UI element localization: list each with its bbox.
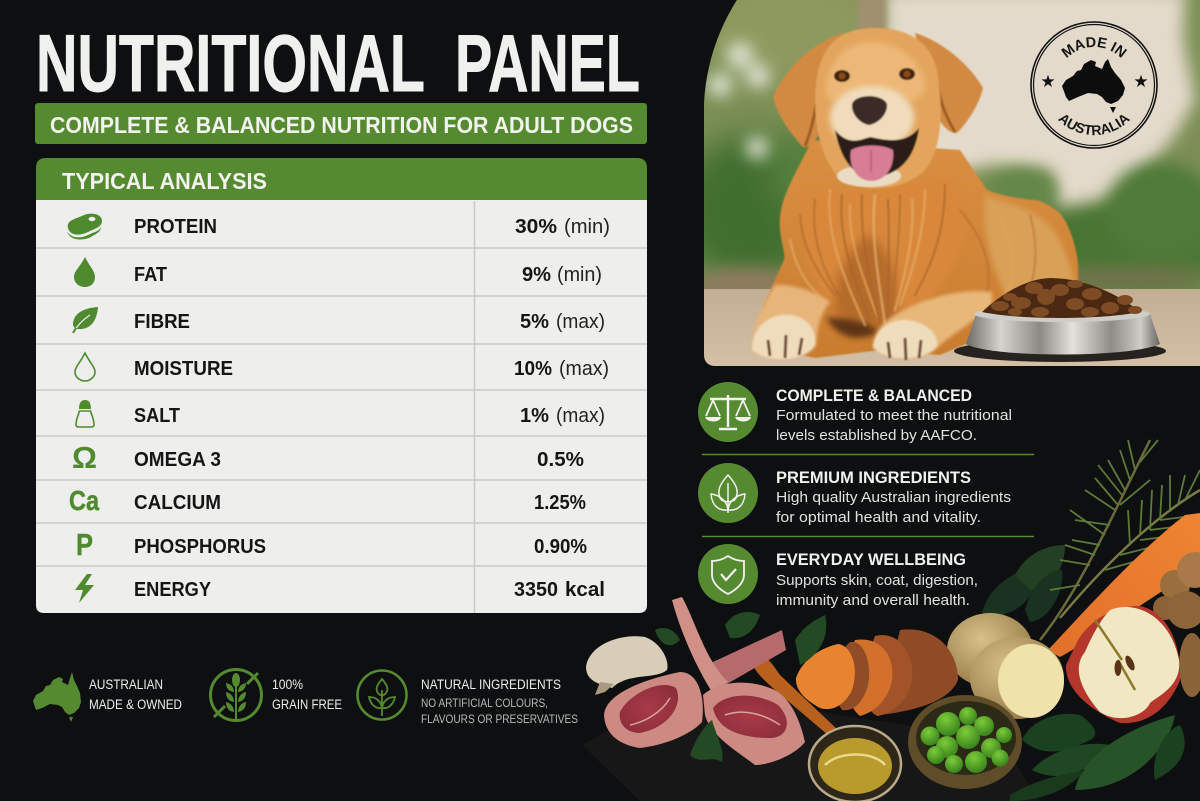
panel: benefit premium ingredients: for optimal health and vitality.	[776, 509, 981, 526]
row: moisture: 10%	[514, 358, 552, 380]
lamb chop right	[672, 597, 805, 765]
panel: benefit everyday wellbeing: immunity and overall health.	[776, 592, 970, 609]
icon: shield	[698, 544, 758, 604]
row: fat: (min)	[557, 264, 602, 286]
row: calcium: Ca	[69, 485, 99, 516]
row: fibre: 5%	[520, 311, 549, 333]
eyes	[834, 70, 850, 82]
panel: benefit complete and balanced: Formulated to meet the nutritional	[776, 407, 1012, 424]
badge: natural ingredients: NATURAL INGREDIENTS	[421, 677, 561, 692]
rosemary	[1040, 440, 1200, 640]
row: energy: 3350	[514, 579, 558, 601]
panel: benefit everyday wellbeing	[698, 544, 978, 609]
dog head	[773, 33, 845, 147]
small carrot	[753, 655, 838, 735]
title: NUTRITIONAL	[36, 19, 425, 109]
badge: natural ingredients: NO ARTIFICIAL COLOURS,	[421, 696, 548, 710]
herbs	[655, 612, 826, 762]
row: calcium: CALCIUM	[134, 492, 221, 514]
food still life	[582, 440, 1200, 801]
mouth	[835, 128, 919, 178]
row: omega 3: 0.5%	[537, 449, 584, 471]
potatoes	[947, 613, 1033, 687]
row: calcium	[69, 485, 586, 516]
stamp: made in australia: ★	[1040, 72, 1056, 91]
left foreleg and paw	[753, 285, 830, 359]
wall	[885, 0, 1195, 207]
row: omega 3: OMEGA 3	[134, 449, 221, 471]
badge: australian made and owned: AUSTRALIAN	[89, 677, 163, 692]
row: salt: (max)	[556, 405, 605, 427]
row: fibre: FIBRE	[134, 311, 190, 333]
dog	[752, 28, 1078, 360]
panel: benefit premium ingredients: PREMIUM INGREDIENTS	[776, 468, 971, 487]
panel: benefit complete and balanced	[698, 382, 1012, 444]
row: moisture: (max)	[559, 358, 609, 380]
icon: sprout	[358, 670, 406, 720]
mushrooms right	[1153, 552, 1200, 697]
icon: scales	[698, 382, 758, 442]
panel: benefit complete and balanced: COMPLETE & BALANCED	[776, 386, 972, 405]
row: energy: kcal	[565, 579, 605, 601]
title: PANEL	[455, 19, 640, 109]
photo: golden retriever with kibble bowl	[704, 0, 1200, 366]
badge: australian made and owned	[33, 672, 182, 722]
row: phosphorus: P	[76, 527, 93, 562]
row: energy	[75, 574, 605, 603]
pea bowl	[908, 695, 1022, 789]
panel: benefit everyday wellbeing: EVERYDAY WELLBEING	[776, 550, 966, 569]
icon: leaves	[698, 463, 758, 523]
badge: grain free: 100%	[272, 677, 303, 692]
row: fibre: (max)	[556, 311, 605, 333]
apple	[1066, 606, 1180, 723]
badge: grain free: GRAIN FREE	[272, 697, 342, 712]
row: protein: PROTEIN	[134, 216, 217, 238]
oil bowl	[809, 726, 901, 801]
stamp: made in australia: MADE IN	[1061, 37, 1128, 58]
icon: australia map	[33, 672, 81, 722]
icon: crossed wheat	[210, 670, 262, 720]
big carrot	[1048, 513, 1200, 657]
subtitle banner	[35, 103, 647, 144]
row: omega 3: Ω	[72, 440, 97, 475]
panel: benefit everyday wellbeing: Supports skin, coat, digestion,	[776, 572, 978, 589]
right foreleg and paw	[874, 291, 992, 358]
row: salt: SALT	[134, 405, 180, 427]
badge: natural ingredients	[358, 670, 578, 726]
lamb chop left	[604, 630, 786, 748]
row: salt	[76, 400, 605, 427]
panel: benefit premium ingredients	[698, 463, 1011, 526]
spinach behind	[982, 545, 1065, 622]
row: fibre	[73, 307, 605, 333]
row: fat: FAT	[134, 264, 167, 286]
row: moisture: MOISTURE	[134, 358, 233, 380]
panel: typical analysis table	[36, 158, 647, 613]
row: protein: 30%	[515, 216, 557, 238]
row: phosphorus: PHOSPHORUS	[134, 536, 266, 558]
ground	[704, 289, 1200, 369]
row: calcium: 1.25%	[534, 492, 586, 514]
row: fat: 9%	[522, 264, 551, 286]
row: salt: 1%	[520, 405, 549, 427]
dog body	[758, 140, 1078, 358]
sweet potato	[796, 629, 958, 716]
badge: grain free	[210, 670, 342, 720]
slate board	[582, 690, 1040, 801]
stamp: made in australia	[1030, 21, 1158, 149]
row: phosphorus	[76, 527, 587, 562]
kibble and bowl	[954, 278, 1166, 362]
basil leaves	[1010, 714, 1185, 801]
row: omega 3	[72, 440, 584, 475]
row: protein	[67, 214, 610, 240]
row: moisture	[75, 353, 609, 381]
subtitle banner: COMPLETE & BALANCED NUTRITION FOR ADULT DOGS	[50, 112, 633, 138]
stamp: made in australia: ★	[1133, 72, 1149, 91]
row: fat	[74, 257, 602, 287]
row: energy: ENERGY	[134, 579, 212, 601]
panel: benefit complete and balanced: levels established by AAFCO.	[776, 427, 977, 444]
mushroom	[586, 636, 668, 695]
panel: benefit premium ingredients: High quality Australian ingredients	[776, 489, 1011, 506]
tongue	[850, 146, 893, 181]
badge: australian made and owned: MADE & OWNED	[89, 697, 182, 712]
row: phosphorus: 0.90%	[534, 536, 587, 558]
badge: natural ingredients: FLAVOURS OR PRESERVATIVES	[421, 712, 578, 726]
row: protein: (min)	[564, 216, 610, 238]
nose	[852, 96, 887, 125]
stamp: made in australia: AUSTRALIA	[1058, 114, 1130, 136]
table heading: TYPICAL ANALYSIS	[62, 168, 267, 194]
